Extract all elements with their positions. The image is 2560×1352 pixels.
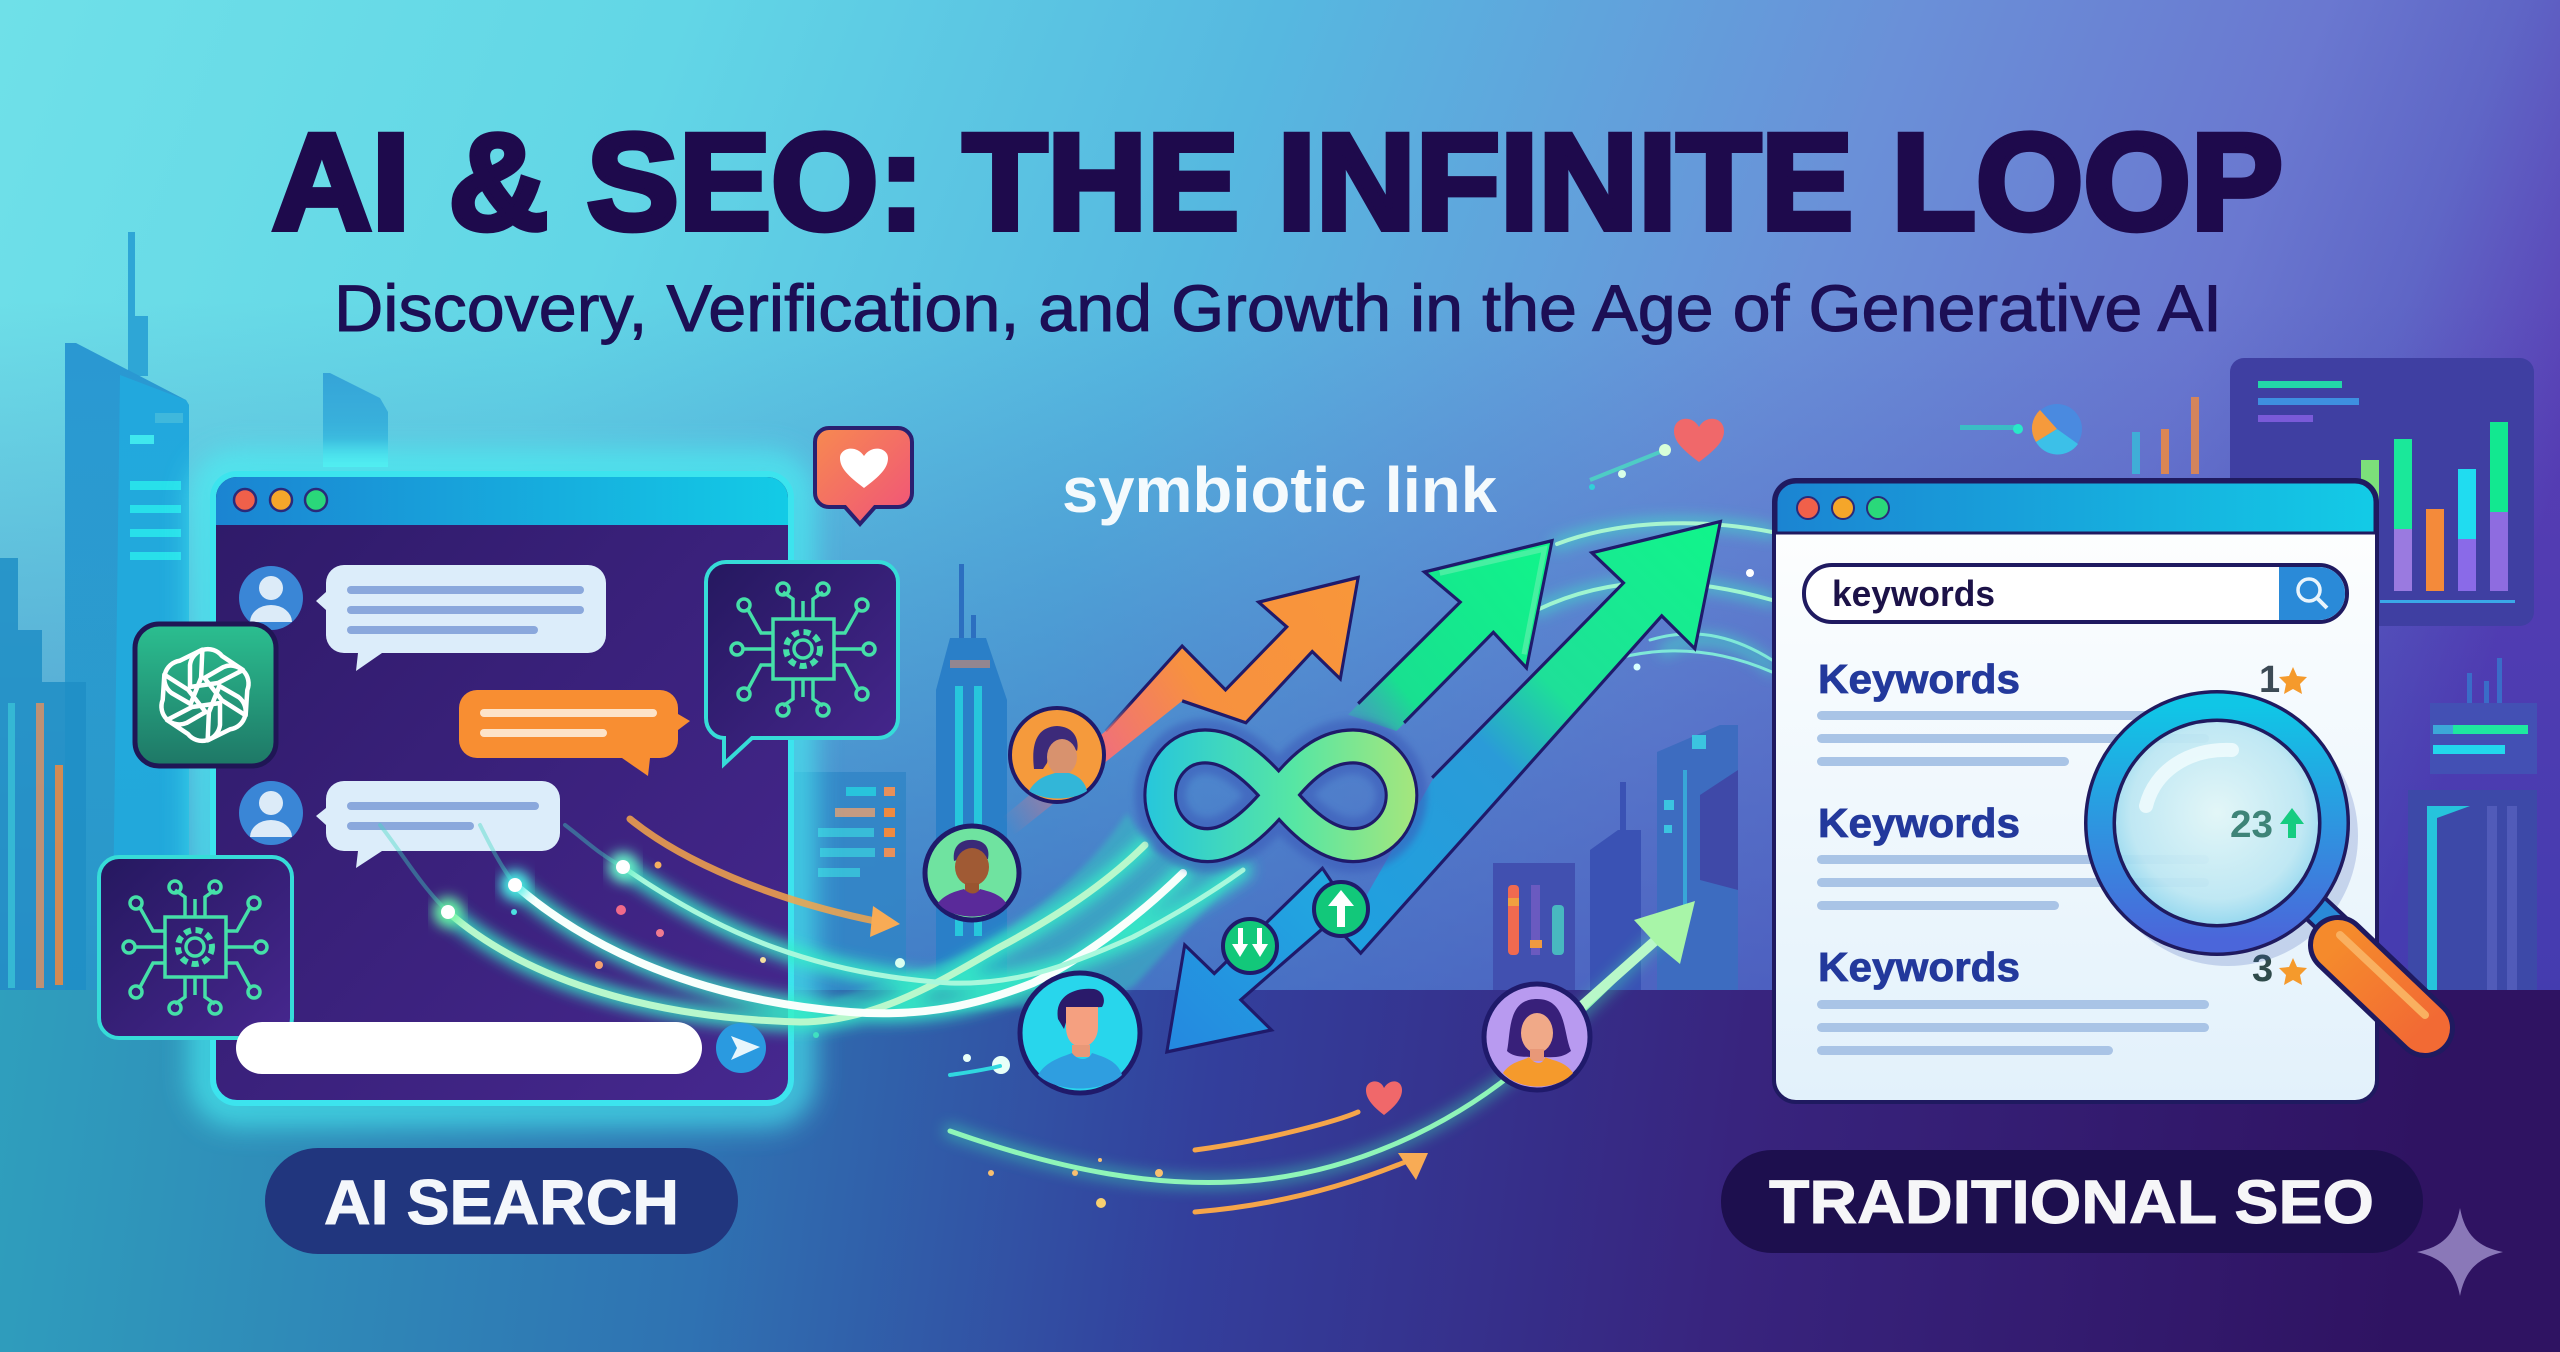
icon: AI chip speech bubble right (706, 562, 898, 764)
avatar: chat user 1 (239, 566, 303, 630)
icon: down arrows badge (1223, 919, 1277, 973)
chat input bar (236, 1022, 702, 1074)
panel: AI search chat window (207, 468, 797, 1109)
search bar: keywords (1832, 573, 1995, 614)
icon: ChatGPT logo tile (135, 624, 276, 766)
label: traditional SEO pill: TRADITIONAL SEO (1769, 1168, 2374, 1236)
result 2: Keywords (1818, 800, 2020, 846)
background city right (1960, 358, 2537, 990)
browser title bar (1776, 482, 2375, 533)
floor band (0, 990, 2560, 1352)
result 1: 1 (2259, 659, 2280, 701)
heading: symbiotic link: symbiotic link (1062, 454, 1497, 526)
title: AI & SEO: THE INFINITE LOOP (272, 106, 2283, 259)
subtitle: Discovery, Verification, and Growth in the Age of Generative AI (334, 271, 2222, 345)
arrow: blue downward (1167, 868, 1348, 1052)
avatar: woman purple (1484, 984, 1590, 1090)
arrow: long green to blue (1344, 522, 1720, 953)
background city center (794, 564, 1738, 994)
arcs behind arrows to right window (1537, 523, 1772, 680)
result 2 (1817, 800, 2209, 910)
icon: heart badge (815, 428, 912, 524)
label: AI search pill (265, 1148, 738, 1254)
avatar: chat user 2 (239, 781, 303, 845)
data streams: AI to center (380, 825, 1243, 1022)
icon: infinity loop (1160, 746, 1402, 845)
sparks (511, 862, 905, 1038)
label: traditional SEO pill (1721, 1150, 2423, 1253)
window title bar (216, 477, 788, 525)
rank 23 with up arrow (2230, 804, 2304, 846)
lower arc with green arrow (950, 901, 1695, 1183)
avatar: man cyan (1020, 973, 1140, 1093)
rank 23 with up arrow: 23 (2230, 804, 2273, 846)
chat bubble 3 (316, 781, 560, 868)
result 3: Keywords (1818, 944, 2020, 990)
arrow: orange growth (1001, 577, 1358, 835)
panel: traditional SEO browser window (1774, 480, 2377, 1102)
sparkle trail with heart (1589, 419, 1724, 490)
arrow: green growth 1 (1348, 541, 1552, 731)
result 3 (1817, 944, 2307, 1055)
icon: magnifying glass (2098, 706, 2425, 1028)
background city left (0, 232, 388, 990)
icon: send button (716, 1023, 766, 1073)
icon: sparkle star (2417, 1208, 2503, 1296)
avatar: man green (925, 826, 1019, 920)
teal band behind streams (830, 813, 1243, 1015)
orange arrows and heart lower (950, 1054, 1428, 1212)
search bar (1804, 565, 2347, 622)
label: AI search pill: AI SEARCH (324, 1168, 679, 1238)
icon: AI chip badge lower left (99, 857, 292, 1038)
avatar: woman orange (1010, 708, 1104, 802)
icon: up arrow badge (1314, 882, 1368, 936)
arrow: orange flow to center (630, 819, 900, 937)
chat bubble 2 orange (459, 690, 690, 776)
result 1: Keywords (1818, 656, 2020, 702)
result 1 (1817, 656, 2307, 766)
chat bubble 1 (316, 565, 606, 671)
result 3: 3 (2252, 948, 2273, 990)
